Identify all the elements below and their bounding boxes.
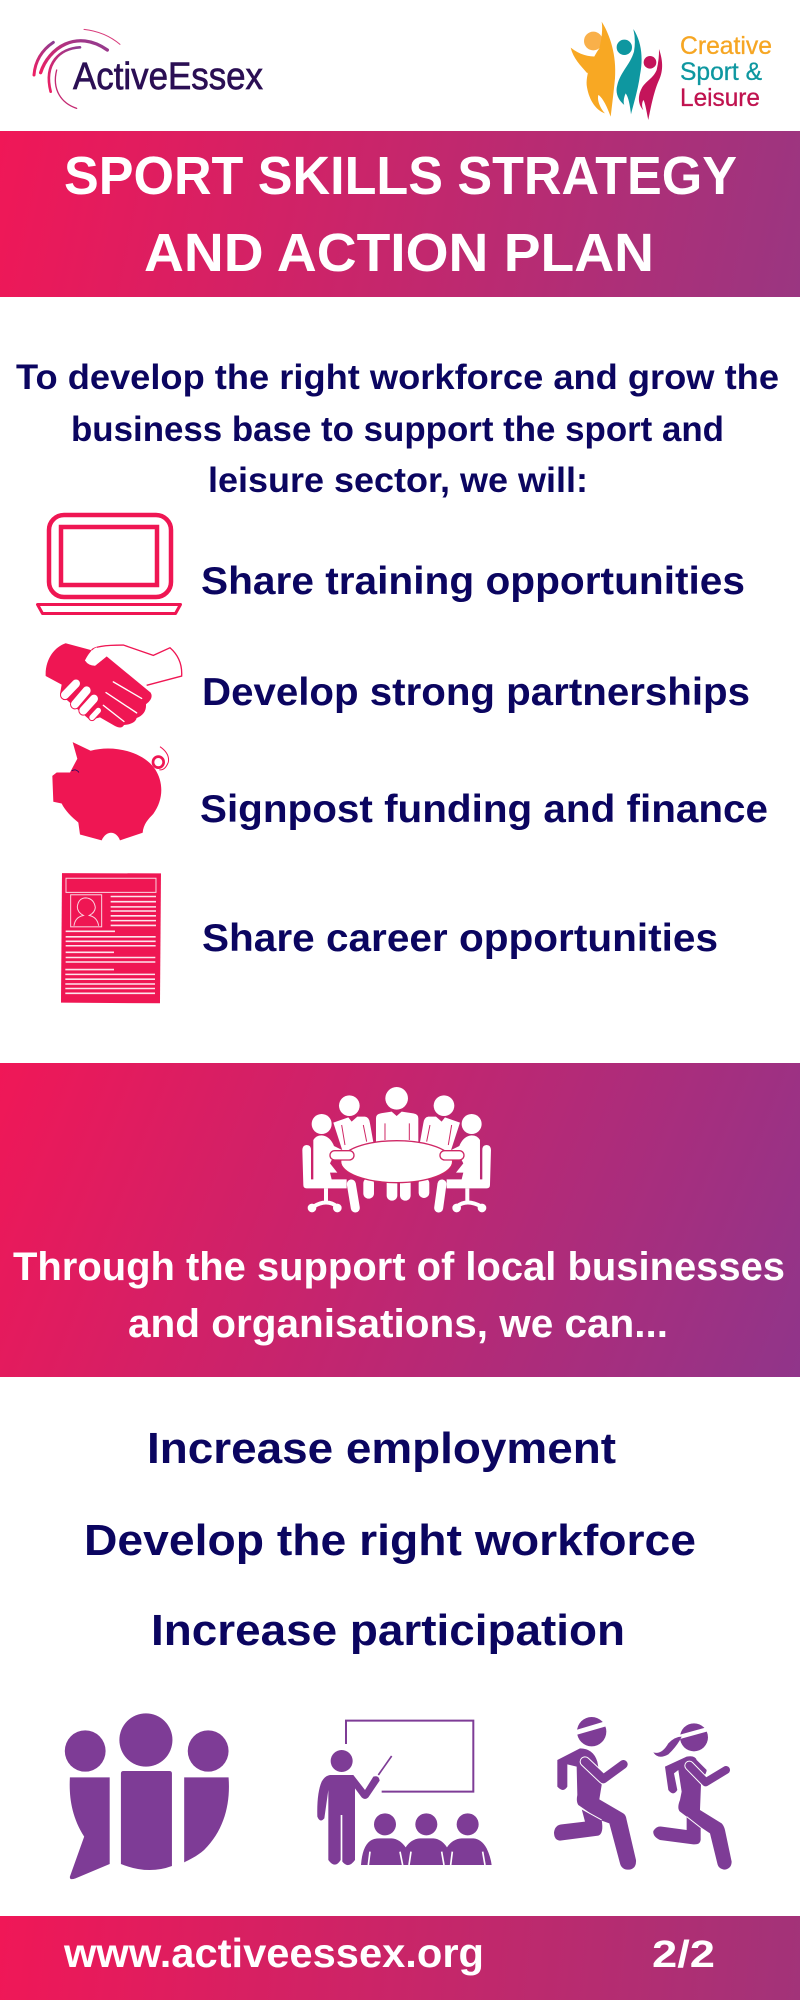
icon: handshake bbox=[46, 643, 182, 727]
title: SPORT SKILLS STRATEGY bbox=[64, 146, 737, 206]
icon: laptop bbox=[38, 515, 180, 614]
outcomes list: Increase participation bbox=[151, 1606, 625, 1655]
text: through the support: Through the support of local businesses bbox=[13, 1245, 785, 1289]
intro text bbox=[16, 358, 779, 500]
title: AND ACTION PLAN bbox=[144, 223, 654, 283]
banner: title bbox=[0, 131, 800, 297]
outcomes list: Develop the right workforce bbox=[84, 1516, 696, 1565]
text: through the support: and organisations, we can... bbox=[128, 1302, 668, 1346]
text: share career opportunities: Share career opportunities bbox=[202, 917, 718, 960]
title bbox=[64, 146, 737, 283]
logo: Active Essex: ActiveEssex bbox=[73, 56, 263, 98]
logo: Creative Sport and Leisure: Creative bbox=[680, 32, 772, 60]
outcomes list bbox=[84, 1424, 696, 1655]
text: through the support bbox=[13, 1245, 785, 1346]
icon: piggy bank bbox=[52, 742, 169, 840]
text: develop strong partnerships: Develop strong partnerships bbox=[202, 671, 750, 714]
icon: runners bbox=[554, 1717, 732, 1870]
logo: Creative Sport and Leisure: Sport & bbox=[680, 58, 762, 86]
icon: teacher and students bbox=[317, 1721, 492, 1865]
intro text: leisure sector, we will: bbox=[208, 461, 588, 500]
website address: www.activeessex.org bbox=[63, 1930, 484, 1976]
icon: group speech bubble bbox=[65, 1713, 229, 1879]
logo: Creative Sport and Leisure: Leisure bbox=[680, 84, 760, 112]
banner: local businesses bbox=[0, 1063, 800, 1377]
page number: 2/2 bbox=[652, 1934, 715, 1976]
intro text: business base to support the sport and bbox=[71, 410, 724, 449]
text: share training opportunities: Share training opportunities bbox=[201, 560, 745, 603]
text: signpost funding and finance: Signpost funding and finance bbox=[200, 788, 768, 831]
icon: CV document bbox=[61, 873, 161, 1003]
intro text: To develop the right workforce and grow the bbox=[16, 358, 779, 397]
logo: Active Essex bbox=[34, 29, 263, 108]
outcomes list: Increase employment bbox=[147, 1424, 616, 1473]
footer bbox=[0, 1916, 800, 2000]
icon: meeting table bbox=[302, 1087, 491, 1212]
logo: Creative Sport and Leisure bbox=[571, 22, 772, 120]
